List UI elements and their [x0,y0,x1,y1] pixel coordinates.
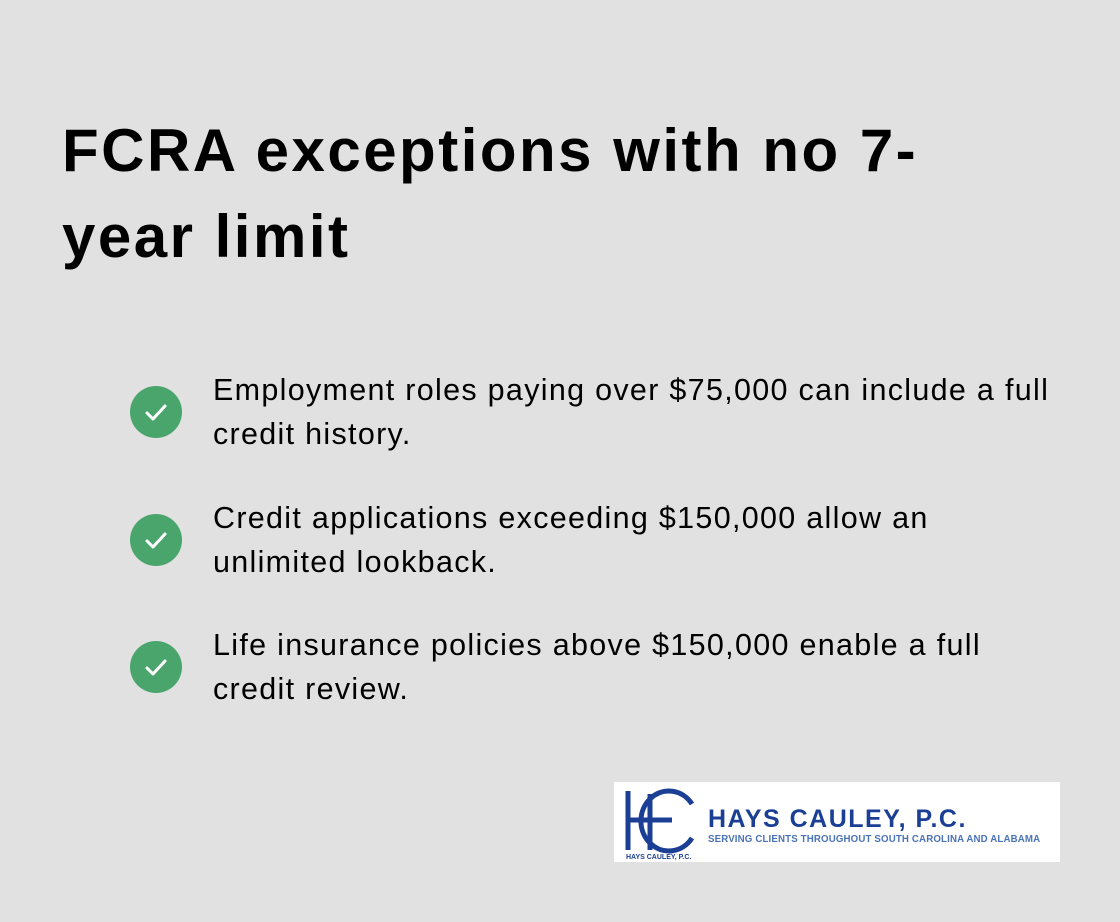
title: year limit [62,203,350,270]
text: credit history. [213,417,412,451]
icon: check [130,386,182,438]
logo mark [628,791,692,851]
text [213,501,929,579]
logo text: HAYS CAULEY, P.C. [708,805,967,833]
logo: HAYS CAULEY, P.C. [626,854,691,861]
list item 1 [130,373,1049,451]
text: unlimited lookback. [213,545,497,579]
text: Life insurance policies above $150,000 enable a full [213,628,981,662]
text: credit review. [213,672,409,706]
icon: check [130,641,182,693]
text: Employment roles paying over $75,000 can include a full [213,373,1049,407]
logo [614,782,1060,862]
text [213,373,1049,451]
title [62,117,918,270]
text [213,628,981,706]
list item 3 [130,628,981,706]
list item 2 [130,501,929,579]
title: FCRA exceptions with no 7- [62,117,918,184]
logo: SERVING CLIENTS THROUGHOUT SOUTH CAROLINA AND ALABAMA [708,834,1040,845]
text: Credit applications exceeding $150,000 allow an [213,501,929,535]
icon: check [130,514,182,566]
